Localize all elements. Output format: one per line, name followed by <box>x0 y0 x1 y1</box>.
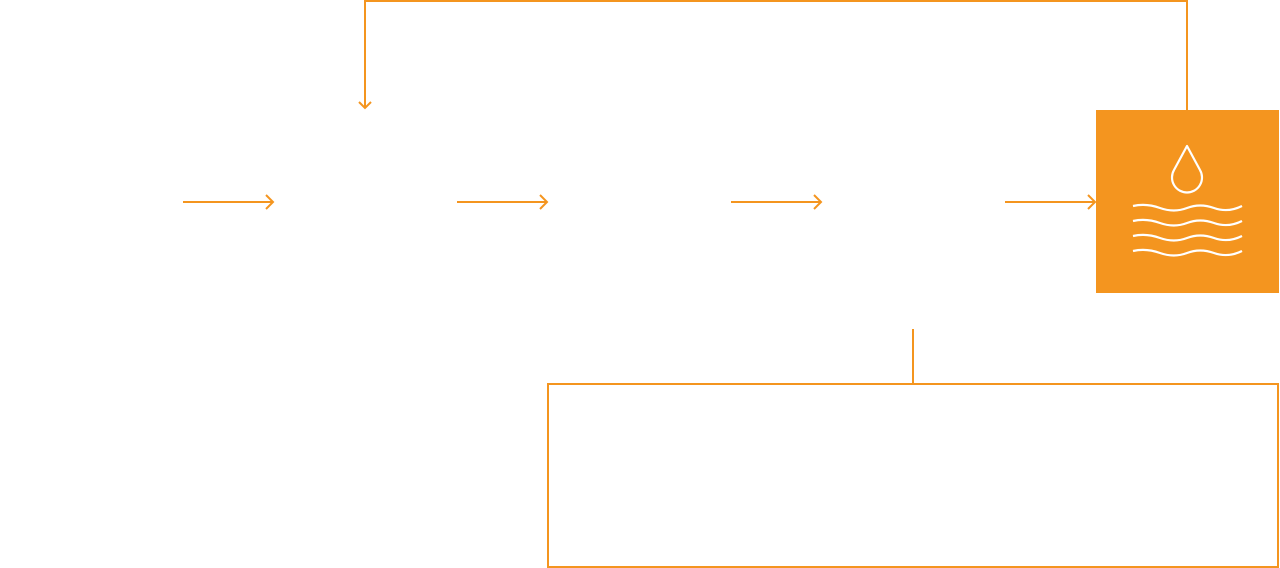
panel: bottom outlined box <box>548 384 1278 567</box>
connector line to bottom panel <box>912 329 914 384</box>
arrow: step 1 to step 2 <box>183 195 273 209</box>
arrow: feedback loop from water box back to step 2 <box>359 1 1187 110</box>
arrow: step 4 to water box <box>1005 195 1095 209</box>
icon: waves <box>1133 205 1242 256</box>
icon: water drop <box>1172 146 1202 192</box>
arrow: step 3 to step 4 <box>731 195 821 209</box>
panel: water box <box>1096 110 1279 293</box>
arrow: step 2 to step 3 <box>457 195 547 209</box>
